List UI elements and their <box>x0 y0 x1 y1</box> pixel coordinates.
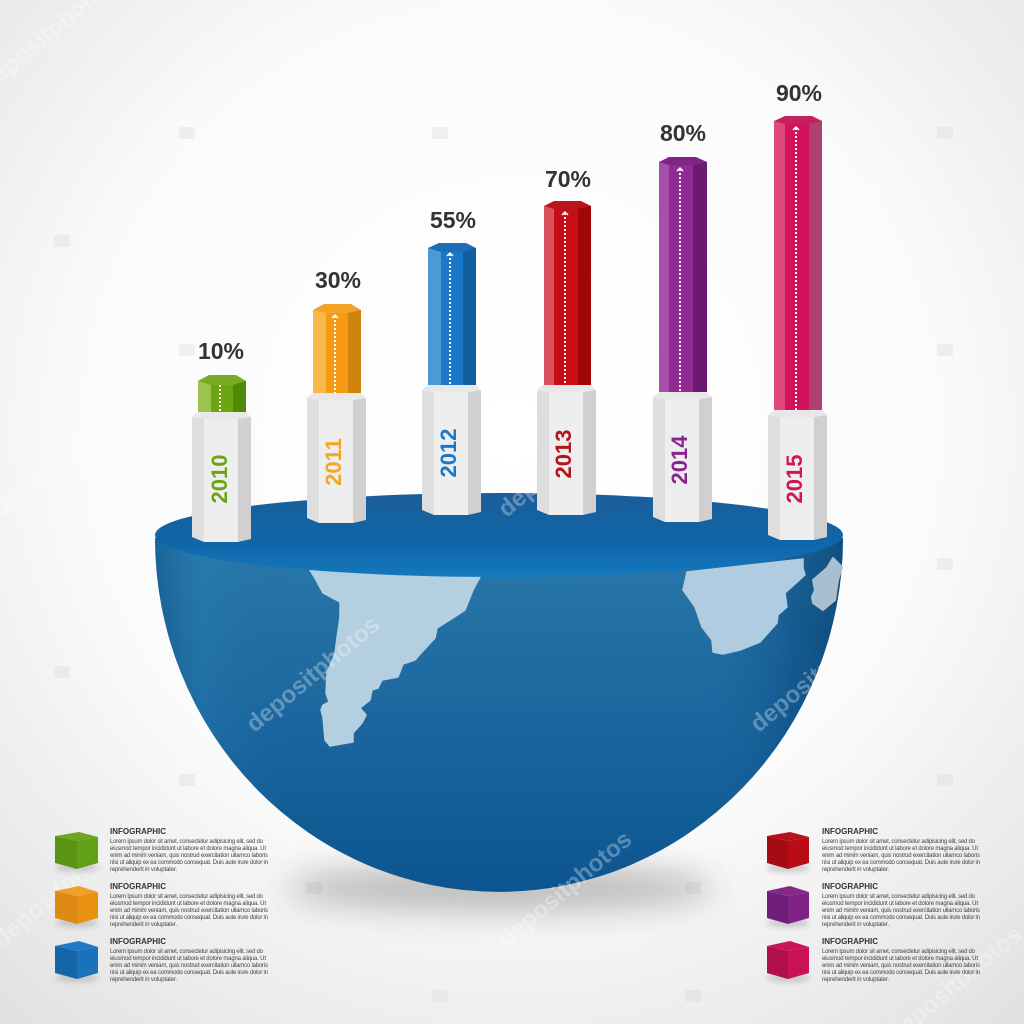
legend text: INFOGRAPHIC <box>110 827 166 836</box>
watermarks: depositphotos <box>743 181 887 308</box>
year column <box>192 412 251 542</box>
stock camera marks <box>54 127 953 1002</box>
bar body <box>774 116 822 414</box>
year column: 2010 <box>207 455 232 503</box>
year column: 2014 <box>667 435 692 484</box>
icon: orange cube <box>55 886 99 927</box>
bar body <box>428 243 476 389</box>
legend text: eiusmod tempor incididunt ut labore et dolore magna aliqua. Ut <box>822 846 978 852</box>
bar 2014 <box>653 120 712 522</box>
legend text: enim ad minim veniam, quis nostrud exercitation ullamco laboris <box>822 853 980 859</box>
year column <box>422 385 481 515</box>
legend text: reprehenderit in voluptater. <box>110 977 177 983</box>
legend item: blue <box>55 937 268 983</box>
legend text: reprehenderit in voluptater. <box>110 867 177 873</box>
bar body <box>659 157 707 396</box>
value label: 70% <box>545 166 591 192</box>
bar body <box>544 201 591 389</box>
legend text <box>822 827 980 873</box>
value label: 30% <box>315 267 361 293</box>
legend text: nisi ut aliquip ex ea commodo consequat. Duis aute irure dolor in <box>822 915 980 921</box>
legend text: Lorem ipsum dolor sit amet, consectetur adipisicing elit, sed do <box>822 839 976 845</box>
year column: 2013 <box>551 430 576 478</box>
year column: 2015 <box>782 455 807 503</box>
icon: blue cube <box>55 941 99 982</box>
continent: South America <box>310 570 480 746</box>
year column: 2012 <box>436 429 461 477</box>
legend item: purple <box>766 882 980 928</box>
legend text: eiusmod tempor incididunt ut labore et dolore magna aliqua. Ut <box>110 956 266 962</box>
legend text: INFOGRAPHIC <box>822 937 878 946</box>
bar 2015 <box>768 80 827 540</box>
globe shading <box>155 538 843 892</box>
legend text: Lorem ipsum dolor sit amet, consectetur adipisicing elit, sed do <box>822 894 976 900</box>
legend text: eiusmod tempor incididunt ut labore et dolore magna aliqua. Ut <box>110 846 266 852</box>
legend text: enim ad minim veniam, quis nostrud exercitation ullamco laboris <box>110 908 268 914</box>
watermarks: depositphotos <box>241 611 385 738</box>
bar 2012 <box>422 207 481 515</box>
legend item: magenta <box>766 937 980 983</box>
legend text <box>110 882 268 928</box>
legend text: enim ad minim veniam, quis nostrud exercitation ullamco laboris <box>110 853 268 859</box>
bar body <box>313 304 361 397</box>
legend text: reprehenderit in voluptater. <box>110 922 177 928</box>
legend text: reprehenderit in voluptater. <box>822 922 889 928</box>
legend text: INFOGRAPHIC <box>110 937 166 946</box>
bar 2011 <box>307 267 366 523</box>
year column <box>537 385 596 515</box>
legend text: enim ad minim veniam, quis nostrud exercitation ullamco laboris <box>822 963 980 969</box>
value label: 90% <box>776 80 822 106</box>
globe dome <box>155 538 843 892</box>
legend text <box>822 882 980 928</box>
year column <box>768 410 827 540</box>
icon: magenta cube <box>766 941 810 982</box>
bar 2013 <box>537 166 596 515</box>
legend text: enim ad minim veniam, quis nostrud exercitation ullamco laboris <box>110 963 268 969</box>
legend text: eiusmod tempor incididunt ut labore et dolore magna aliqua. Ut <box>110 901 266 907</box>
watermarks: depositphotos <box>493 826 637 953</box>
legend text: Lorem ipsum dolor sit amet, consectetur adipisicing elit, sed do <box>110 894 264 900</box>
legend text: INFOGRAPHIC <box>822 827 878 836</box>
icon: red cube <box>766 832 810 872</box>
bar body <box>198 375 246 416</box>
legend text: eiusmod tempor incididunt ut labore et dolore magna aliqua. Ut <box>822 901 978 907</box>
year column: 2011 <box>321 438 346 486</box>
legend text: nisi ut aliquip ex ea commodo consequat. Duis aute irure dolor in <box>822 970 980 976</box>
globe shadow <box>285 864 715 912</box>
icon: green cube <box>55 832 99 872</box>
legend text: reprehenderit in voluptater. <box>822 977 889 983</box>
watermarks: depositphotos <box>493 396 637 523</box>
legend text <box>822 937 980 983</box>
continent: Africa <box>683 559 805 654</box>
bar 2010 <box>192 338 251 542</box>
legend text: nisi ut aliquip ex ea commodo consequat. Duis aute irure dolor in <box>110 860 268 866</box>
legend item: orange <box>55 882 268 928</box>
year column <box>653 392 712 522</box>
legend text: nisi ut aliquip ex ea commodo consequat. Duis aute irure dolor in <box>110 970 268 976</box>
watermarks: depositphotos <box>238 181 382 308</box>
value label: 10% <box>198 338 244 364</box>
legend text <box>110 937 268 983</box>
legend text: INFOGRAPHIC <box>822 882 878 891</box>
legend text: Lorem ipsum dolor sit amet, consectetur adipisicing elit, sed do <box>822 949 976 955</box>
legend item: green <box>55 827 268 873</box>
legend text: Lorem ipsum dolor sit amet, consectetur adipisicing elit, sed do <box>110 949 264 955</box>
year column <box>307 393 366 523</box>
legend text: INFOGRAPHIC <box>110 882 166 891</box>
legend text: enim ad minim veniam, quis nostrud exercitation ullamco laboris <box>822 908 980 914</box>
legend text: reprehenderit in voluptater. <box>822 867 889 873</box>
globe top surface <box>155 493 843 577</box>
icon: purple cube <box>766 886 810 927</box>
legend text: eiusmod tempor incididunt ut labore et dolore magna aliqua. Ut <box>822 956 978 962</box>
watermarks: depositphotos <box>745 611 889 738</box>
legend text: nisi ut aliquip ex ea commodo consequat. Duis aute irure dolor in <box>110 915 268 921</box>
legend text: Lorem ipsum dolor sit amet, consectetur adipisicing elit, sed do <box>110 839 264 845</box>
legend text: nisi ut aliquip ex ea commodo consequat. Duis aute irure dolor in <box>822 860 980 866</box>
continent: Madagascar <box>812 558 842 610</box>
legend item: red <box>766 827 980 873</box>
half globe <box>155 493 843 892</box>
value label: 80% <box>660 120 706 146</box>
value label: 55% <box>430 207 476 233</box>
legend text <box>110 827 268 873</box>
